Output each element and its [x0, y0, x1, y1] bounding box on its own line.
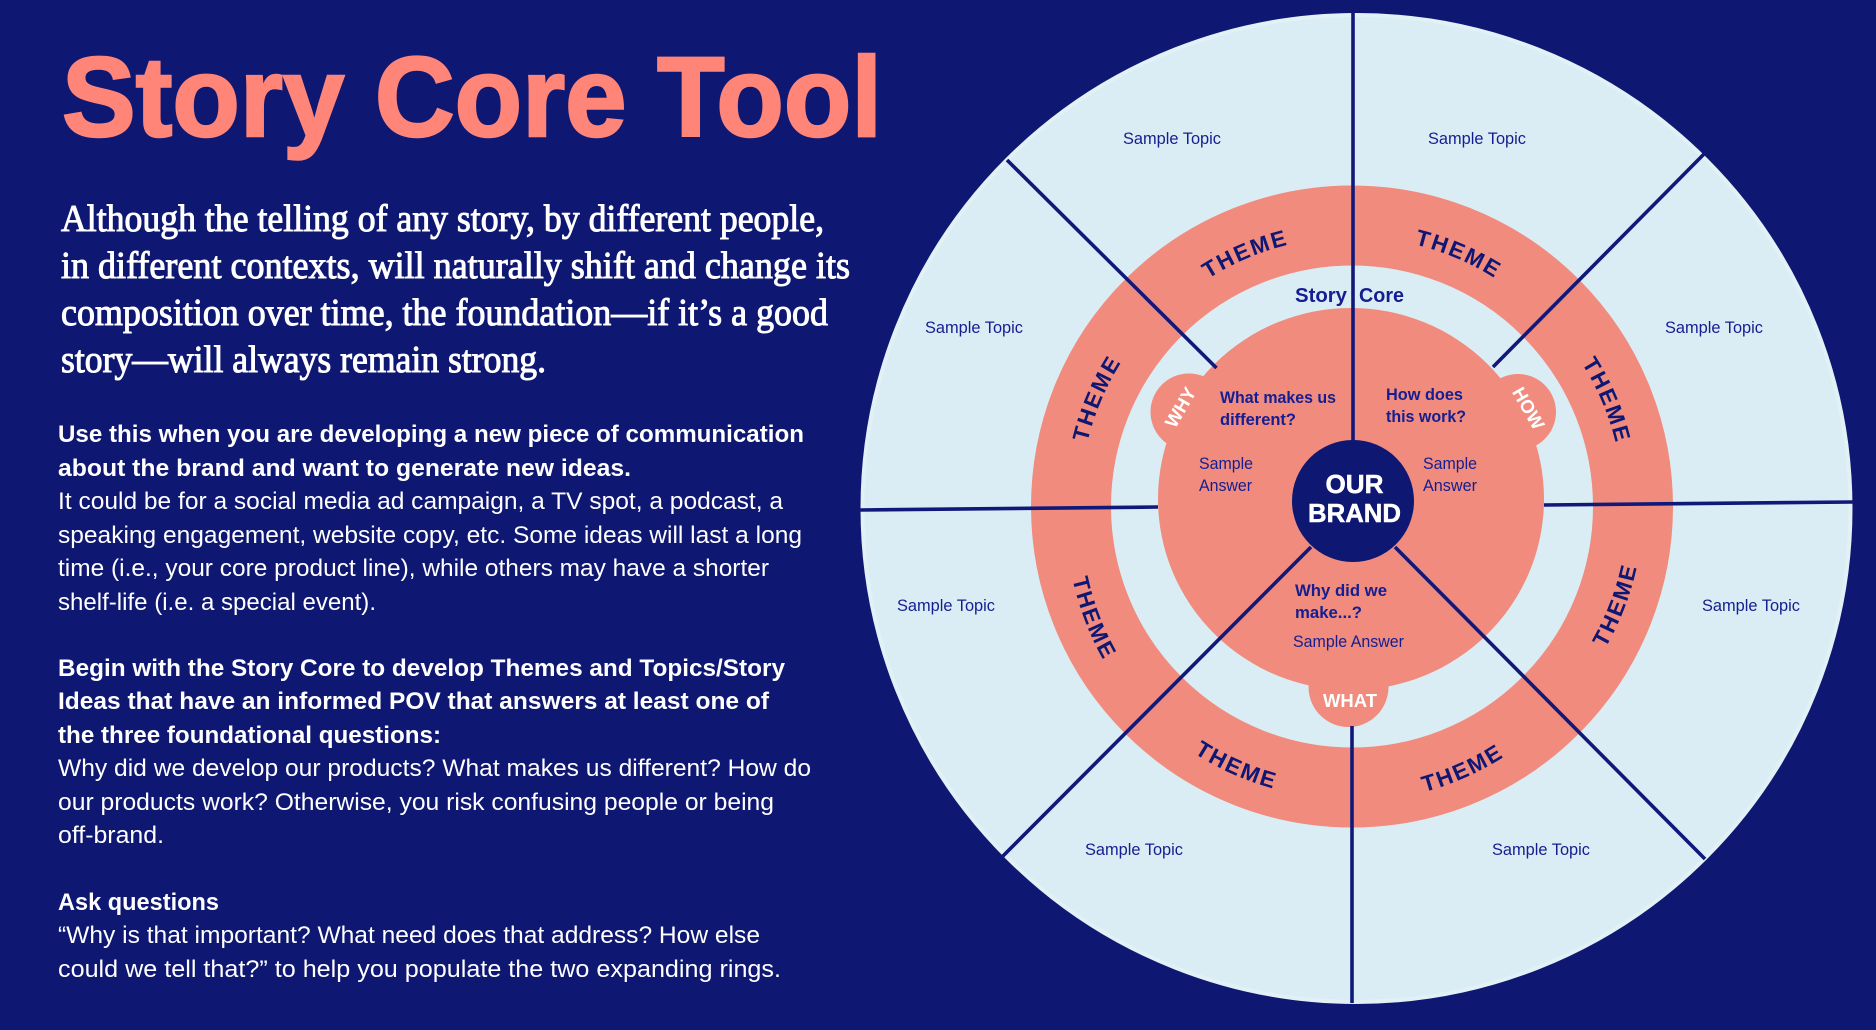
theme ring — [1071, 226, 1633, 788]
how question — [1386, 386, 1477, 495]
sample topics: Sample Topic — [1702, 596, 1800, 615]
text block: begin with the story core: Ideas that have an informed POV that answers at least one of — [58, 688, 770, 715]
theme labels: THEME — [1584, 355, 1630, 442]
story core heading: Story — [1295, 285, 1348, 307]
sample topics: Sample Topic — [925, 318, 1023, 337]
text block: ask questions — [58, 889, 781, 983]
intro text block — [61, 198, 850, 381]
why question: Sample — [1199, 454, 1253, 473]
theme labels: THEME — [1418, 229, 1501, 278]
sample topics: Sample Topic — [1665, 318, 1763, 337]
label: what: WHAT — [1323, 690, 1378, 711]
intro text block: in different contexts, will naturally shift and change its — [61, 245, 850, 287]
text block: ask questions: could we tell that?” to help you populate the two expanding rings. — [58, 956, 781, 983]
why question — [1199, 389, 1336, 495]
text block: use this when: about the brand and want to generate new ideas. — [58, 455, 631, 482]
what question — [1293, 582, 1404, 651]
text block: use this when: Use this when you are developing a new piece of communication — [58, 421, 804, 448]
theme labels: THEME — [1198, 740, 1276, 788]
why question: What makes us — [1220, 389, 1336, 407]
why question: Answer — [1199, 476, 1252, 495]
intro text block: Although the telling of any story, by different people, — [61, 198, 824, 240]
story core diagram — [860, 13, 1852, 1004]
theme labels: THEME — [1592, 565, 1636, 644]
sample topics: Sample Topic — [1492, 840, 1590, 859]
how question: How does — [1386, 386, 1463, 404]
text block: begin with the story core: Begin with the Story Core to develop Themes and Topics/Story — [58, 655, 785, 682]
text block: ask questions: Ask questions — [58, 889, 219, 916]
text block: use this when: time (i.e., your core product line), while others may have a shorter — [58, 555, 769, 582]
text block: use this when: speaking engagement, website copy, etc. Some ideas will last a long — [58, 522, 802, 549]
label: why: WHY — [1161, 383, 1201, 431]
sample topics: Sample Topic — [1085, 840, 1183, 859]
text block: begin with the story core: Why did we develop our products? What makes us different? How do — [58, 755, 811, 782]
theme labels: THEME — [1420, 744, 1503, 791]
what question: Sample Answer — [1293, 632, 1404, 651]
how question: Sample — [1423, 454, 1477, 473]
sample topics: Sample Topic — [897, 596, 995, 615]
text block: ask questions: “Why is that important? What need does that address? How else — [58, 922, 760, 949]
label: how: HOW — [1508, 383, 1549, 434]
intro text block: composition over time, the foundation—if it’s a good — [61, 292, 828, 334]
theme labels — [1072, 229, 1636, 791]
outer topics disc — [862, 15, 1850, 1002]
story core heading: Core — [1359, 285, 1404, 307]
text block: use this when: shelf-life (i.e. a special event). — [58, 589, 376, 616]
sample topics: Sample Topic — [1428, 129, 1526, 148]
text block: use this when: It could be for a social media ad campaign, a TV spot, a podcast, a — [58, 488, 783, 515]
theme labels: THEME — [1200, 230, 1287, 276]
sample topics: Sample Topic — [1123, 129, 1221, 148]
text block: use this when — [58, 421, 804, 616]
intro text block: story—will always remain strong. — [61, 339, 546, 381]
center hub — [1292, 440, 1414, 562]
sample topics — [897, 129, 1800, 859]
what question: Why did we — [1295, 582, 1387, 600]
center hub: BRAND — [1308, 498, 1401, 528]
text block: begin with the story core: off-brand. — [58, 822, 164, 849]
center hub: OUR — [1326, 469, 1384, 499]
title: Story Core Tool — [62, 34, 882, 160]
text block: begin with the story core: the three foundational questions: — [58, 722, 441, 749]
divider lines — [860, 13, 1853, 1003]
story core shape — [1150, 308, 1556, 727]
theme labels: THEME — [1074, 575, 1116, 659]
what question: make...? — [1295, 604, 1362, 622]
text block: begin with the story core: our products work? Otherwise, you risk confusing people or being — [58, 789, 774, 816]
how question: Answer — [1423, 476, 1477, 495]
story core heading — [1295, 285, 1404, 307]
theme labels: THEME — [1072, 356, 1120, 439]
text block: begin with the story core — [58, 655, 811, 849]
how question: this work? — [1386, 408, 1466, 426]
why question: different? — [1220, 411, 1296, 429]
